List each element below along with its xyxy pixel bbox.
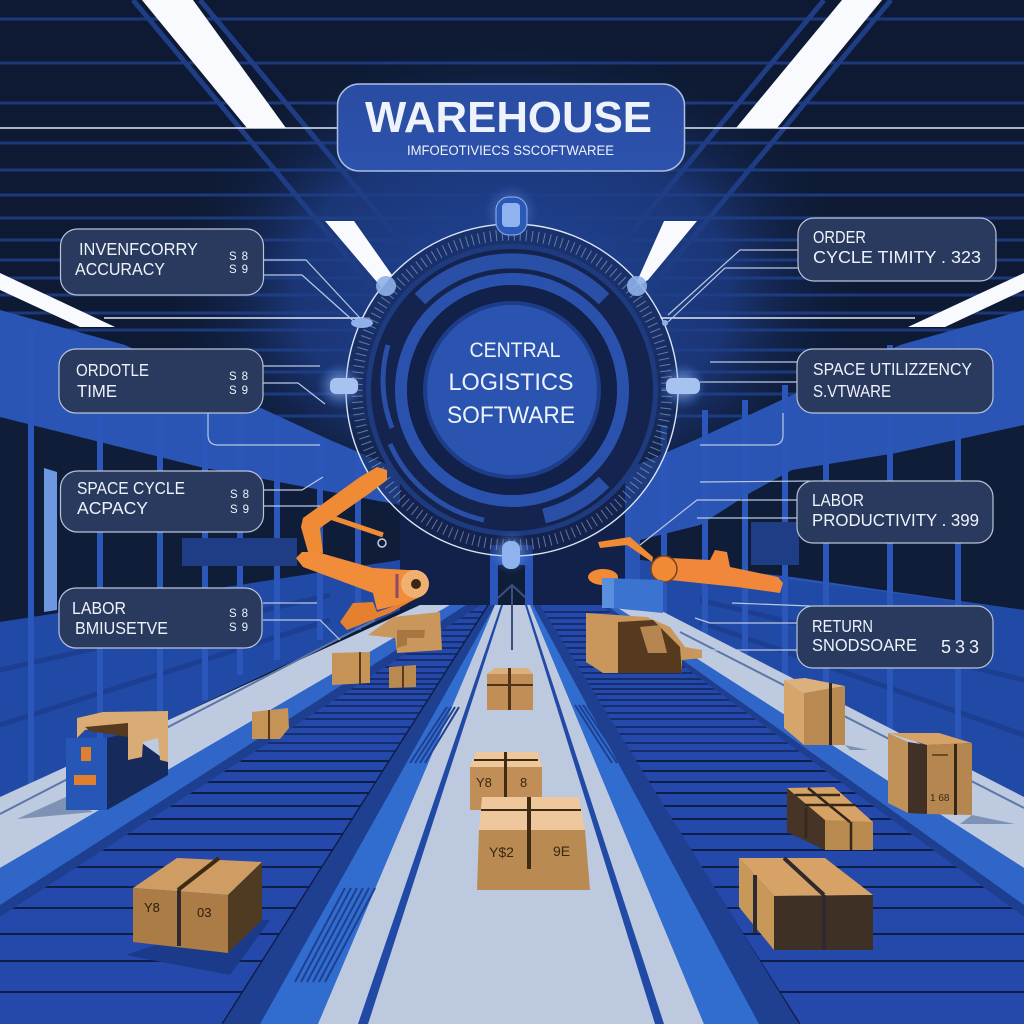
KPI panel: labor productivity: [797, 481, 993, 543]
KPI panel: labor: S 8: [229, 608, 248, 620]
KPI panel: order time: S 8: [229, 371, 248, 383]
ceiling light strips: [0, 0, 1024, 327]
KPI panel: labor: LABOR: [72, 598, 126, 618]
KPI panel: inventory accuracy: ACCURACY: [75, 259, 165, 279]
KPI panel: labor: S 9: [229, 622, 248, 634]
KPI panel: space cycle accuracy: SPACE CYCLE: [77, 478, 185, 498]
left conveyor belt: [0, 600, 500, 1024]
bottom left large box: Y8: [144, 900, 160, 915]
KPI panel: space utilization: [797, 349, 993, 413]
central logistics dial: [346, 224, 678, 556]
boxes near left robot: [252, 612, 442, 739]
KPI panel: order cycle time: [798, 218, 996, 281]
KPI panel: space cycle accuracy: ACPACY: [77, 498, 148, 518]
dial label: [447, 339, 575, 429]
left robot arm: [296, 467, 429, 630]
KPI panel: space cycle accuracy: [60, 471, 264, 532]
KPI panel: space utilization: SPACE UTILIZZENCY: [813, 359, 972, 379]
KPI panel: inventory accuracy: INVENFCORRY: [79, 239, 198, 259]
KPI panel: space utilization: S.VTWARE: [813, 381, 891, 401]
left warehouse wall: [0, 310, 400, 800]
centre boxes on walkway: Y8: [476, 775, 492, 790]
glowing dial nodes: [316, 184, 707, 574]
KPI panel: order time: ORDOTLE: [76, 360, 149, 380]
connector lines: [208, 250, 810, 650]
subtitle: IMFOEOTIVIECS SSCOFTWAREE: [407, 143, 614, 158]
KPI panel: inventory accuracy: [60, 229, 264, 295]
right small box: [784, 678, 868, 750]
KPI panel: inventory accuracy: S 8: [229, 251, 248, 263]
KPI panel: labor: [59, 588, 262, 648]
central walkway and rails: [223, 605, 799, 1024]
central gate column: [490, 545, 533, 650]
bottom left large box: [126, 858, 270, 975]
KPI panel: labor productivity: PRODUCTIVITY . 399: [812, 510, 979, 530]
centre boxes on walkway: Y$2: [489, 844, 514, 860]
rail hatch marks: [295, 705, 627, 982]
box cluster behind right robot: [586, 613, 702, 673]
centre boxes on walkway: 9E: [553, 843, 570, 859]
KPI panel: return: [797, 606, 993, 668]
right robot arm: [588, 537, 783, 613]
floor and side walkways: [0, 605, 1024, 1024]
centre boxes on walkway: [470, 668, 590, 890]
right conveyor belt: [500, 600, 1024, 1024]
right warehouse wall: [625, 310, 1024, 800]
KPI panel: order cycle time: ORDER: [813, 227, 866, 247]
KPI panel: space cycle accuracy: S 8: [230, 489, 249, 501]
background ceiling: [0, 0, 1024, 620]
dial label: LOGISTICS: [448, 369, 574, 396]
KPI panel: order cycle time: CYCLE TIMITY . 323: [813, 247, 981, 267]
bottom left large box: 03: [197, 905, 211, 920]
KPI panel: inventory accuracy: S 9: [229, 264, 248, 276]
open box on blue crate: [17, 711, 168, 819]
KPI panel: order time: TIME: [77, 381, 117, 401]
dial label: CENTRAL: [470, 339, 560, 362]
KPI panel: space cycle accuracy: S 9: [230, 504, 249, 516]
right tall box: 1 68: [930, 793, 950, 804]
KPI panel: order time: [59, 349, 263, 413]
bottom right large box: [739, 858, 873, 950]
centre boxes on walkway: 8: [520, 775, 527, 790]
title text: WAREHOUSE: [365, 93, 652, 142]
KPI panel: labor productivity: LABOR: [812, 490, 864, 510]
dial label: SOFTWARE: [447, 402, 575, 429]
KPI panel: return: SNODSOARE: [812, 635, 917, 655]
KPI panel: return: RETURN: [812, 616, 873, 636]
KPI panel: return: 533: [941, 637, 979, 657]
right tall box: [888, 733, 1015, 824]
KPI panel: labor: BMIUSETVE: [75, 618, 168, 638]
right stacked boxes: [787, 787, 873, 850]
KPI panel: order time: S 9: [229, 385, 248, 397]
dark back wall behind dial: [330, 460, 700, 610]
title panel: [338, 84, 684, 171]
